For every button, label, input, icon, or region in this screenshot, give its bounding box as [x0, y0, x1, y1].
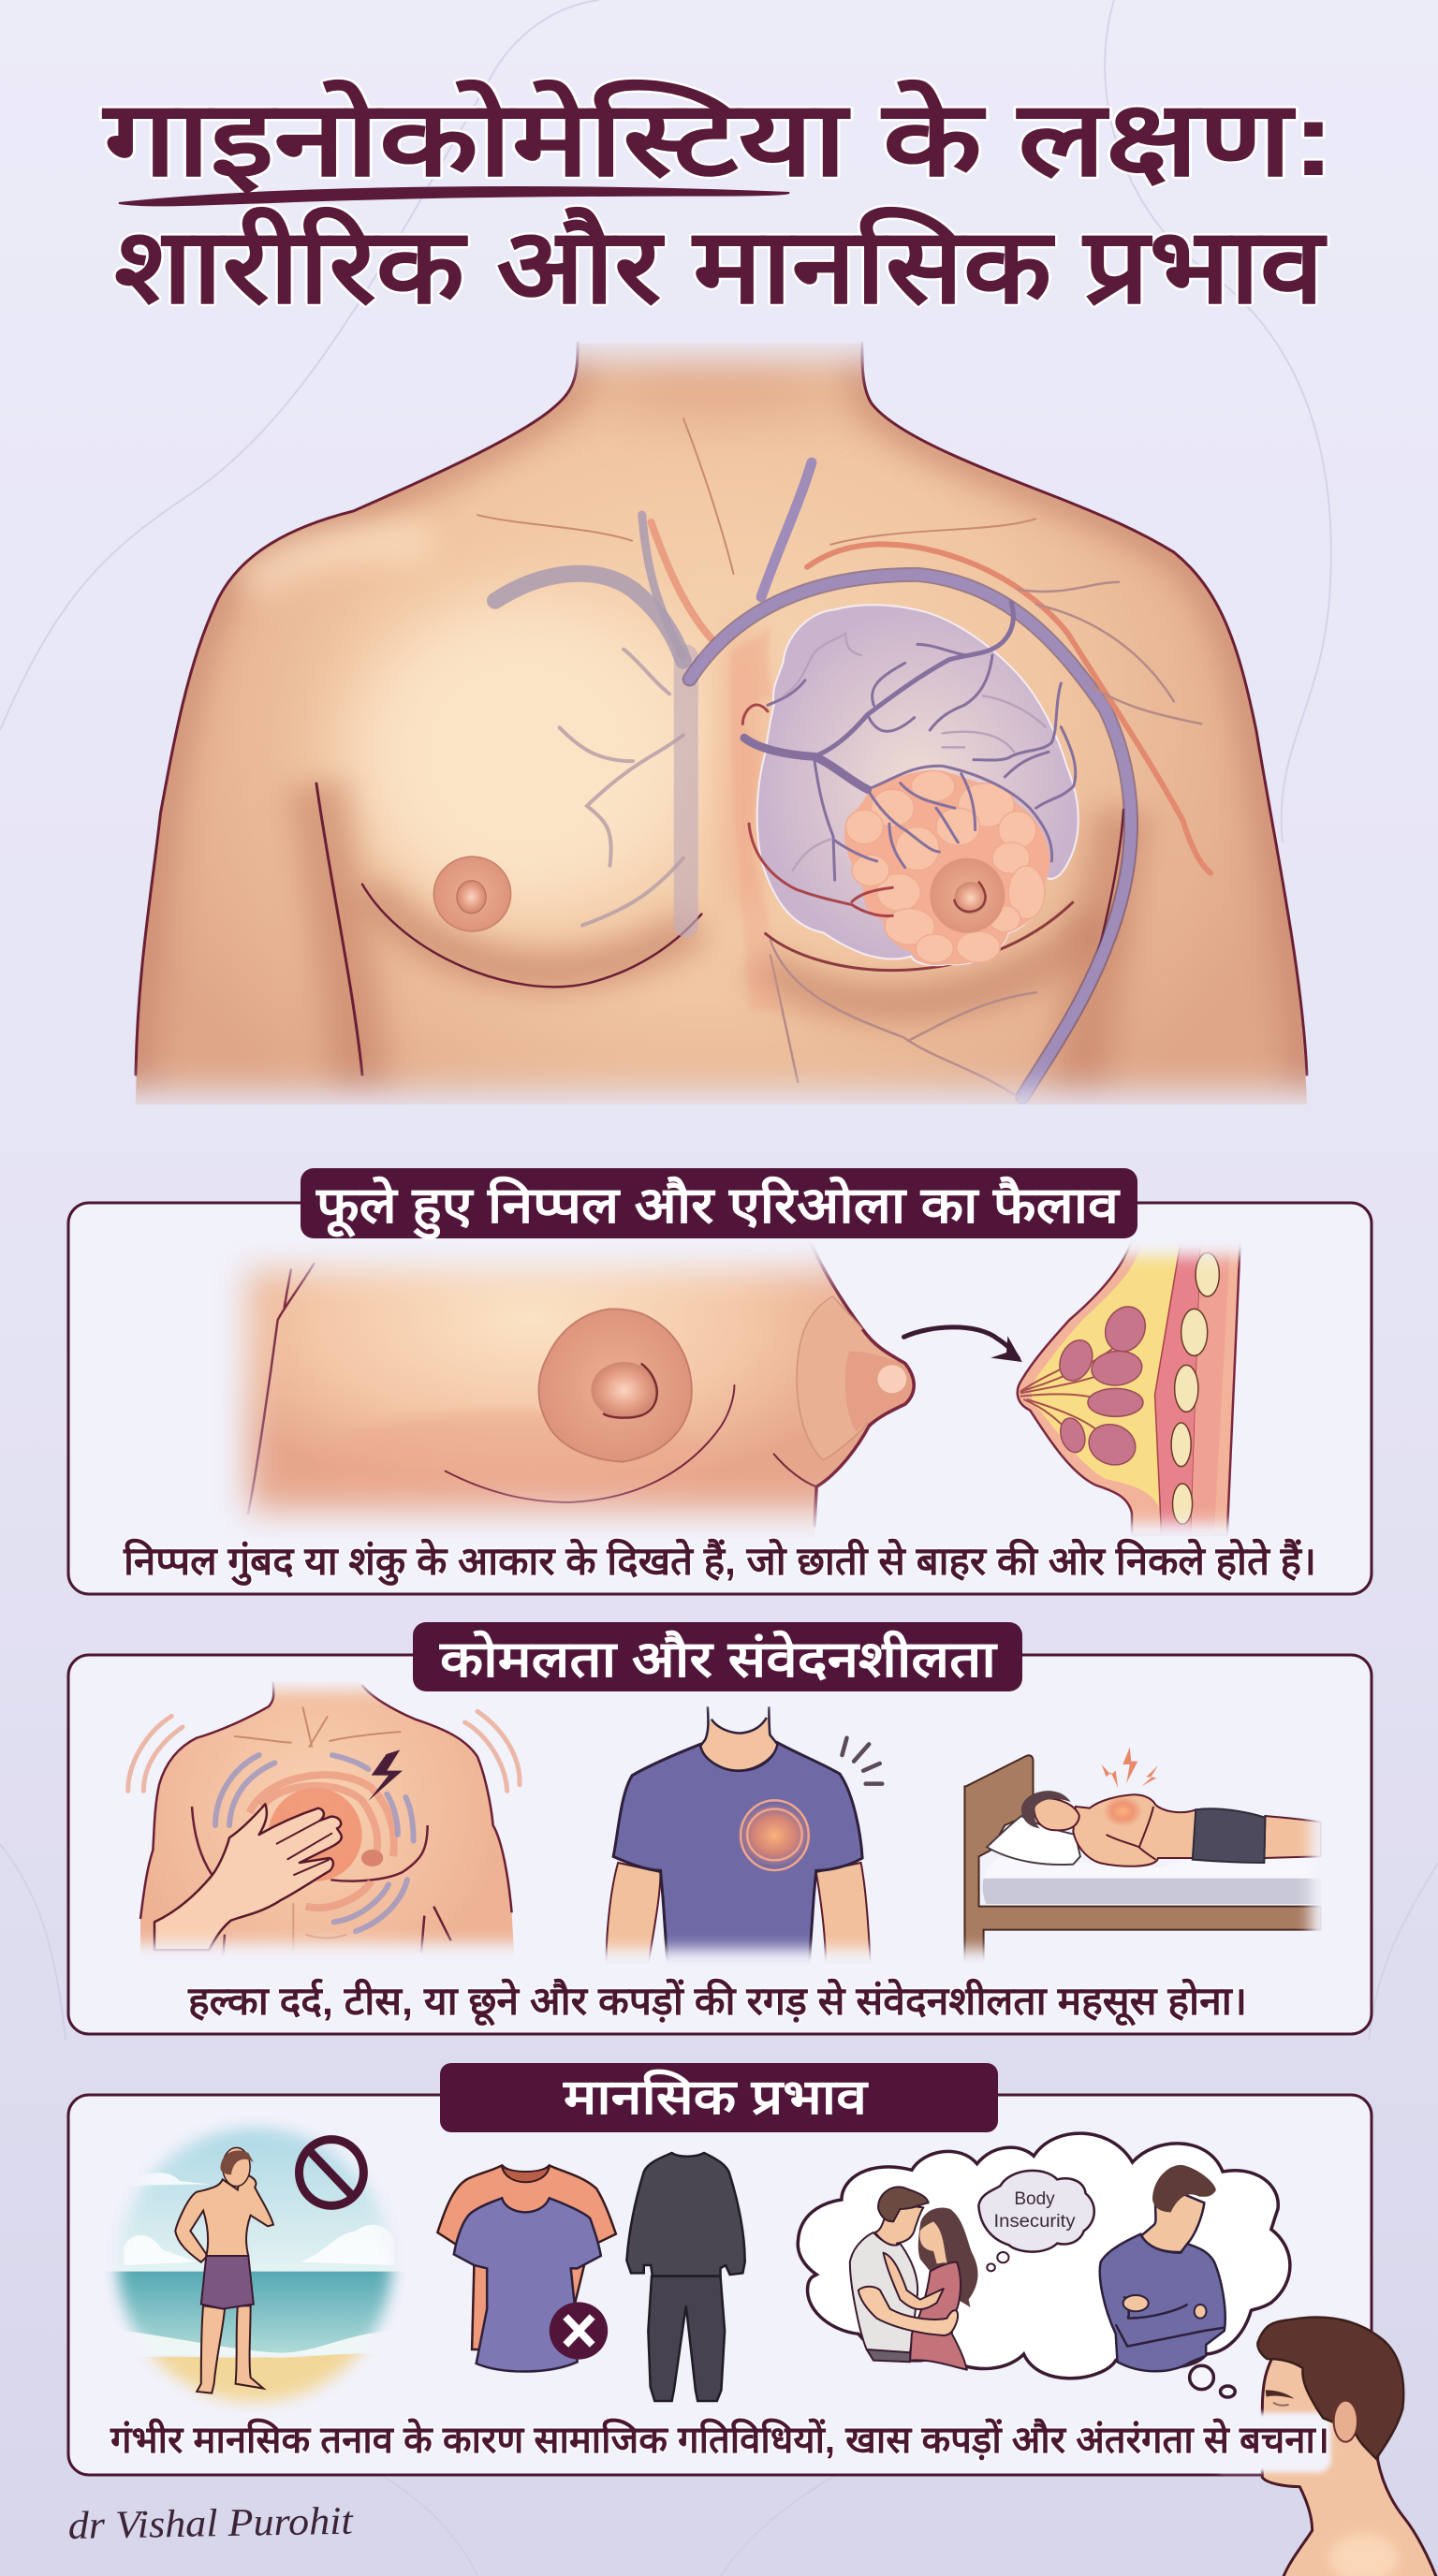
collar lines — [477, 417, 1036, 575]
shirt — [613, 1743, 862, 1966]
tiny bubble — [987, 2263, 995, 2271]
no sign — [299, 2140, 363, 2205]
heading pill 1 — [301, 1168, 1137, 1239]
couple — [850, 2187, 977, 2370]
cross badge — [550, 2302, 608, 2360]
irritation marks — [842, 1738, 882, 1784]
brow — [1266, 2390, 1295, 2399]
lightning bolt — [368, 1749, 403, 1801]
individual lobes — [845, 770, 1045, 963]
neck — [700, 1716, 777, 1771]
torso body — [136, 344, 1307, 1105]
chest skin — [202, 1238, 914, 1538]
lower abs — [293, 1903, 346, 1956]
small bubble — [997, 2252, 1008, 2262]
profile figure head — [1211, 2318, 1437, 2576]
enlarged gland traced — [730, 602, 1078, 1011]
cloud outline — [798, 2133, 1290, 2378]
hero torso illustration — [136, 329, 1307, 1105]
red vessels — [742, 705, 892, 916]
shoulder shading — [1329, 2534, 1398, 2576]
title underline swoosh — [119, 187, 789, 205]
orange tee — [437, 2165, 616, 2349]
hair — [1257, 2318, 1403, 2459]
neck and face skin — [1262, 2356, 1437, 2576]
bed frame — [964, 1755, 1321, 1963]
front nipple arc — [603, 1364, 657, 1418]
beach scene backdrop — [94, 2115, 412, 2415]
t-shirt figure and bed — [607, 1706, 1321, 1966]
nipple arc — [954, 882, 986, 912]
thought cloud — [798, 2133, 1290, 2397]
panel frame 2 — [68, 1655, 1372, 2034]
pain sparks — [1102, 1748, 1158, 1788]
figures in panel 3 — [175, 2140, 745, 2401]
heading pill 3: मानसिक प्रभाव — [563, 2069, 869, 2125]
side nipple — [845, 1351, 914, 1432]
face wash — [1211, 2412, 1331, 2472]
neck lines — [700, 1706, 777, 1771]
red skin beside gland — [730, 627, 780, 1011]
chest glow — [737, 1803, 813, 1868]
panel: swollen nipple — [68, 1203, 1372, 1594]
pillow — [987, 1816, 1080, 1865]
gland veins — [744, 602, 1076, 880]
heading pill 1: फूले हुए निप्पल और एरिओला का फैलाव — [315, 1176, 1121, 1239]
body lines — [248, 1245, 914, 1526]
insecurity label — [994, 2189, 1076, 2232]
title line 2: शारीरिक और मानसिक प्रभाव — [114, 206, 1328, 325]
sleeper arm — [1107, 1807, 1155, 1860]
right areola — [930, 858, 1005, 933]
signature: dr Vishal Purohit — [67, 2500, 355, 2548]
small cloud — [978, 2171, 1094, 2252]
left veins — [495, 515, 711, 926]
hand — [154, 1804, 342, 1950]
chest skin — [140, 1682, 515, 1969]
panel frame 1 — [68, 1203, 1372, 1594]
under-gland crease — [765, 901, 1074, 971]
nipple front and side illustration — [202, 1238, 914, 1538]
sleeper pain rings — [1103, 1795, 1142, 1827]
caption 2: हल्का दर्द, टीस, या छूने और कपड़ों की रगड़ से संवेदनशीलता महसूस होना। — [187, 1978, 1247, 2027]
lobe cluster — [844, 770, 1049, 965]
sleeper shorts — [1193, 1808, 1265, 1863]
gland body — [757, 605, 1078, 965]
sleeper body — [1073, 1794, 1196, 1866]
nipple — [361, 1850, 383, 1866]
heading pill 2 — [413, 1622, 1022, 1691]
sad man — [1100, 2165, 1225, 2371]
under-breast shading — [320, 1411, 714, 1516]
cross mark — [565, 2317, 593, 2345]
finger lines — [276, 1821, 332, 1875]
trailing bubble large — [1190, 2365, 1213, 2390]
sleeper hair — [1021, 1791, 1071, 1828]
front nipple — [591, 1362, 657, 1418]
ear — [1334, 2401, 1357, 2442]
sleeper head — [1034, 1798, 1079, 1830]
clavicle lines — [234, 1706, 401, 1748]
caption 3: गंभीर मानसिक तनाव के कारण सामाजिक गतिविधियों, खास कपड़ों और अंतरंगता से बचना। — [110, 2418, 1329, 2461]
track pants — [648, 2276, 725, 2401]
heading pill 2: कोमलता और संवेदनशीलता — [439, 1630, 998, 1688]
pain rings — [250, 1775, 394, 1908]
insecurity label: Insecurity — [994, 2212, 1076, 2232]
panel: mental effects — [68, 2095, 1372, 2475]
eye line — [1273, 2403, 1289, 2406]
mattress top — [984, 1856, 1321, 1879]
right nipple — [954, 882, 987, 915]
left arm — [607, 1863, 660, 1963]
title — [102, 79, 1335, 325]
chest outline — [140, 1682, 512, 1956]
title line 1: गाइनोकोमेस्टिया के लक्षण: — [102, 79, 1335, 198]
side areola — [797, 1296, 905, 1460]
heading pill 3 — [440, 2063, 998, 2132]
anatomical cross section — [1018, 1238, 1240, 1535]
right arm — [816, 1863, 871, 1963]
mattress side — [983, 1879, 1321, 1904]
soft shading — [136, 329, 1307, 1105]
shoulder pain arcs — [128, 1711, 520, 1791]
main vein right side — [690, 462, 1211, 1097]
orange collar — [502, 2167, 550, 2182]
side outline top — [862, 1329, 914, 1426]
purple tee — [454, 2198, 601, 2372]
front areola — [538, 1309, 692, 1462]
left nipple centre — [457, 881, 486, 914]
pain glow — [269, 1788, 362, 1881]
side nipple highlight — [877, 1365, 906, 1393]
trailing bubble small — [1221, 2386, 1235, 2397]
panel frame 3 — [68, 2095, 1372, 2475]
chest with hand — [128, 1682, 520, 1969]
sweatshirt — [626, 2153, 745, 2276]
panel: tenderness — [68, 1655, 1372, 2034]
curved arrow — [903, 1327, 1022, 1362]
sleeper legs — [1264, 1816, 1321, 1858]
glow rings — [741, 1800, 809, 1870]
insecurity label: Body — [1014, 2189, 1055, 2209]
man on beach — [175, 2147, 273, 2393]
left nipple — [433, 856, 511, 931]
lavender arcs — [215, 1755, 414, 1931]
torso outline — [136, 344, 1307, 1075]
caption 1: निप्पल गुंबद या शंकु के आकार के दिखते हैं, जो छाती से बाहर की ओर निकले होते हैं। — [123, 1538, 1316, 1586]
